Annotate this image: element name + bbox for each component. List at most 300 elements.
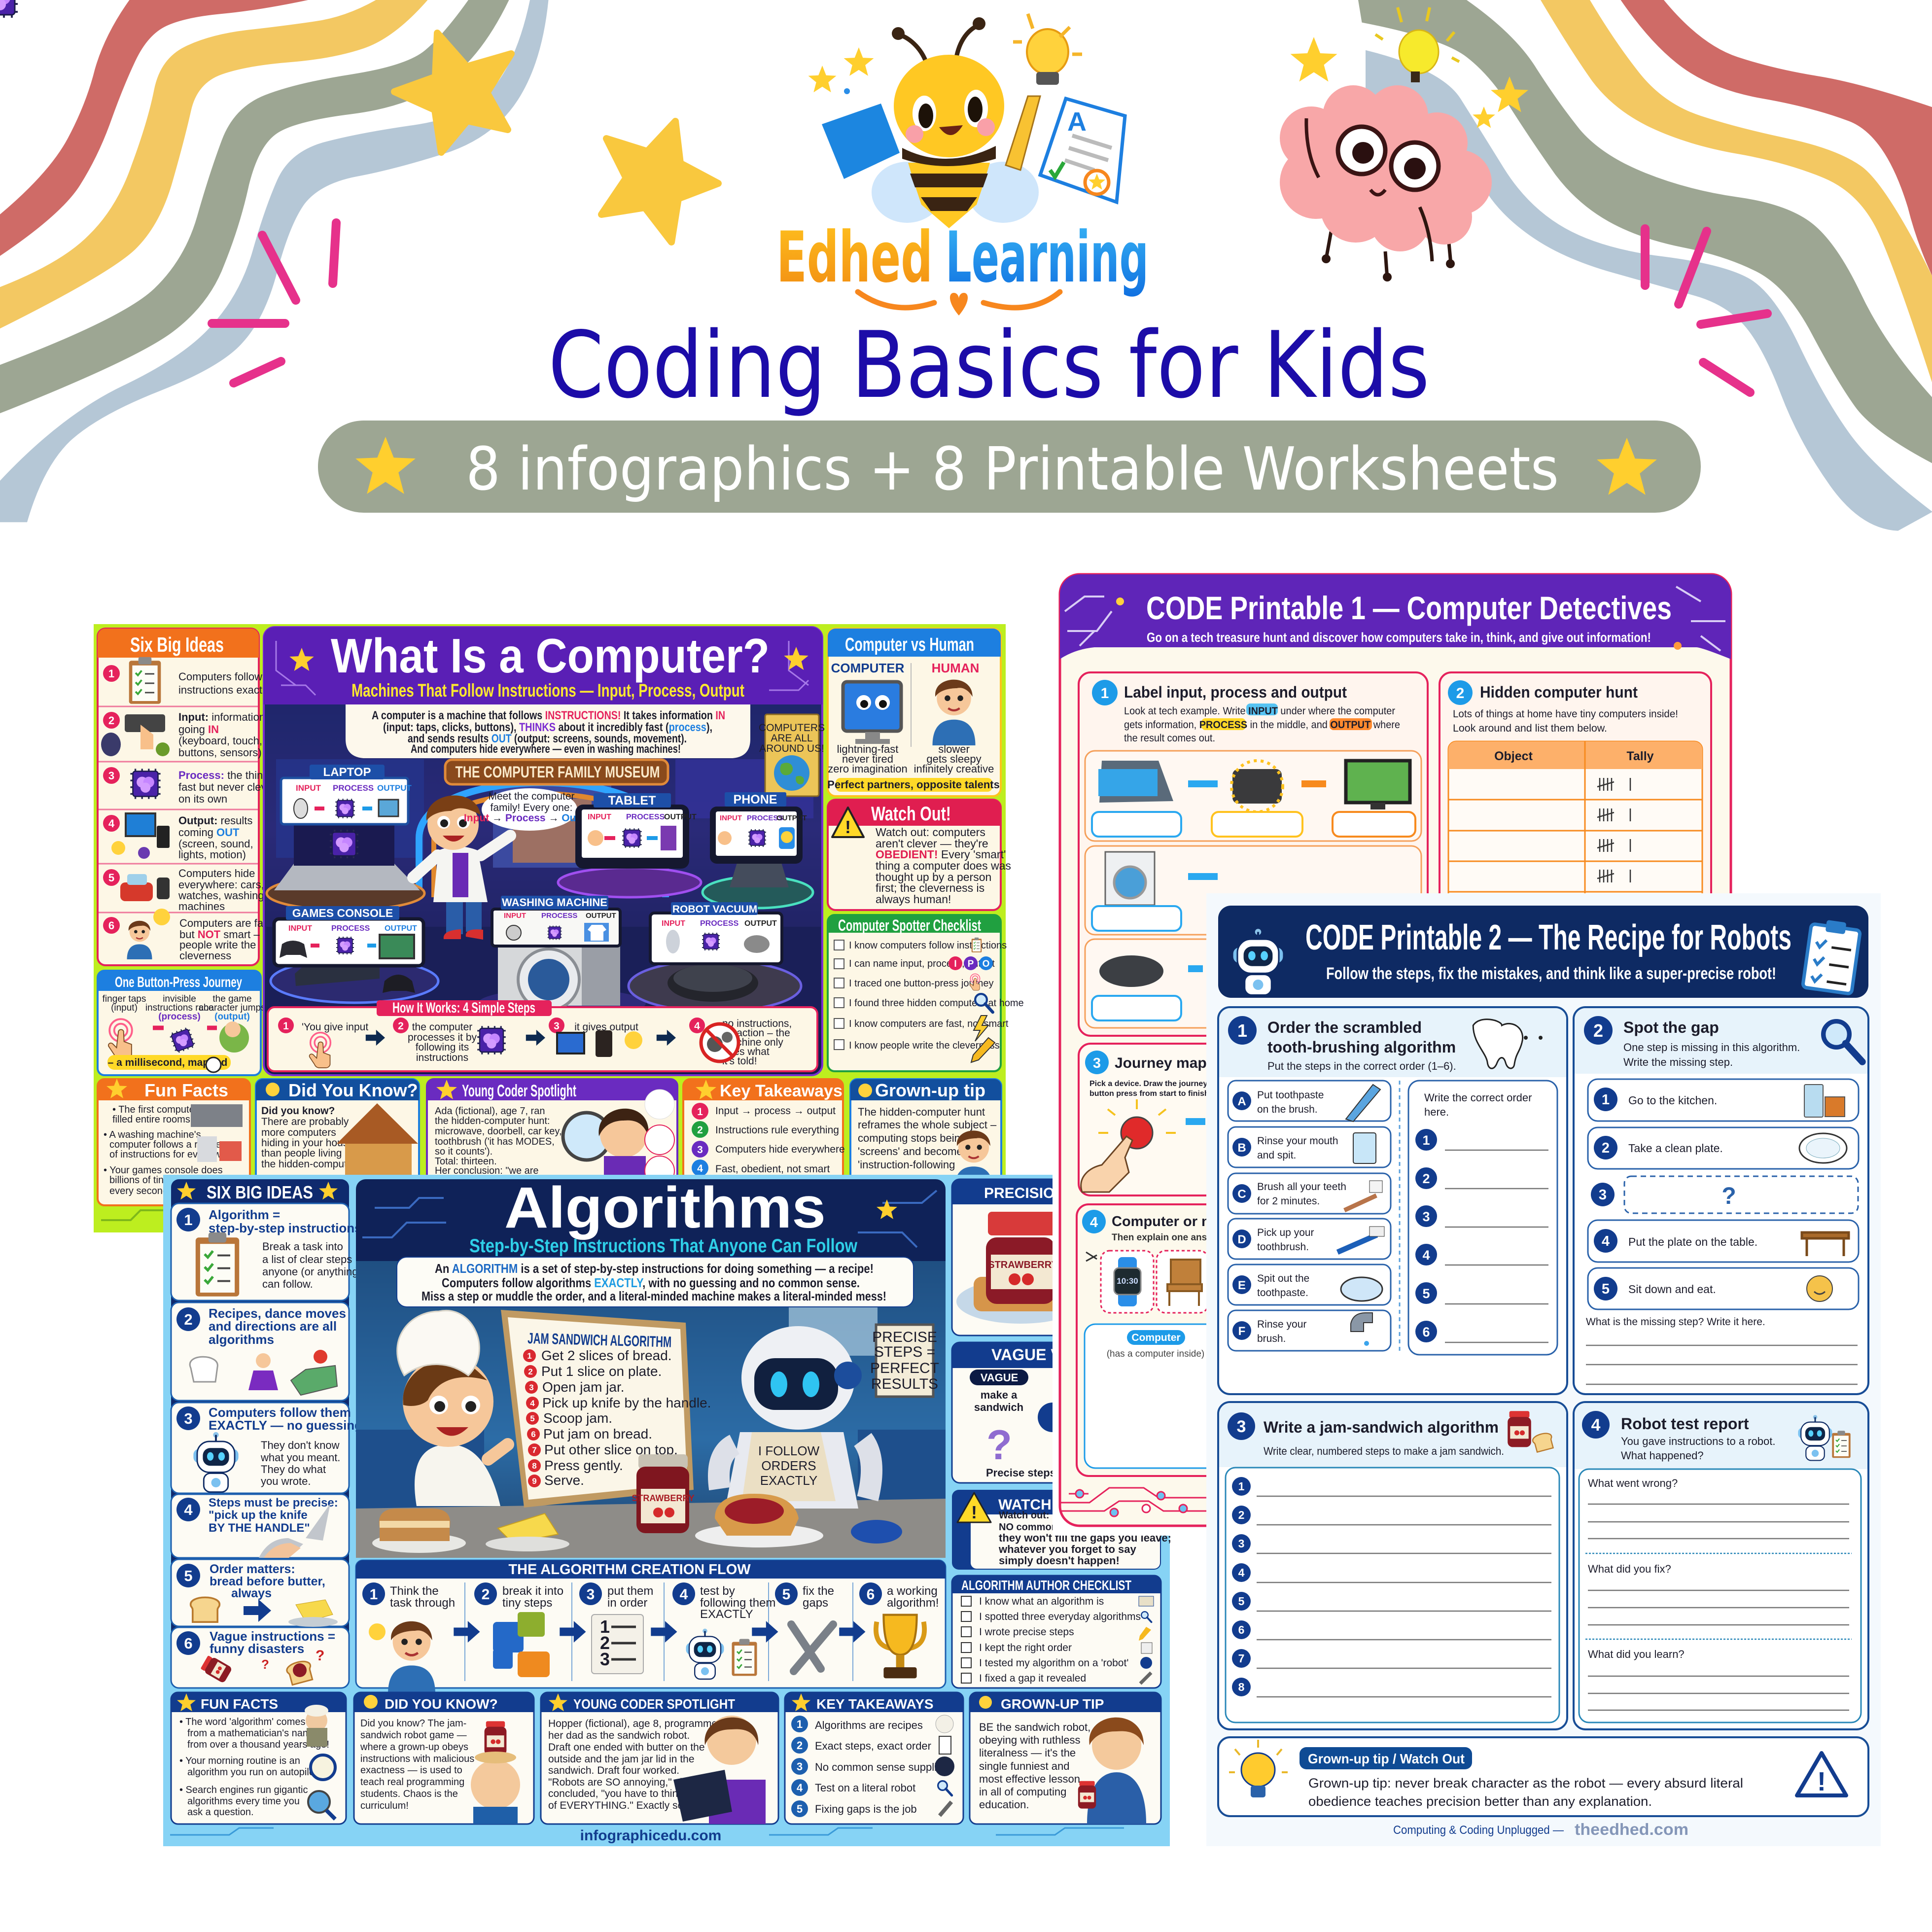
panel: six big ideas: people write the — [179, 939, 256, 951]
panel: grown-up tip: literalness — it's the — [979, 1747, 1076, 1759]
sign: computers are all around us: ARE ALL — [771, 733, 813, 744]
panel 3: write a jam-sandwich algorithm: 6 — [1238, 1623, 1244, 1636]
panel: computer vs human — [827, 629, 1001, 796]
scrambled step cards: D — [1237, 1233, 1246, 1246]
panel: how it works: does what — [722, 1046, 770, 1057]
panel: key takeaways: 2 — [797, 1739, 803, 1752]
robot: ORDERS — [761, 1458, 816, 1473]
panel 3: write a jam-sandwich algorithm: 1 — [1238, 1480, 1245, 1493]
header band — [264, 627, 822, 704]
panel: fun facts: • Your morning routine is an — [179, 1756, 300, 1766]
worksheet 1: computer detectives — [1053, 568, 1738, 1536]
icon: star top left — [394, 33, 511, 152]
panel: watch out: Watch Out! — [871, 803, 951, 825]
panel: six big ideas: 2 — [108, 714, 114, 727]
panel: did you know: exactness — is used to — [360, 1765, 462, 1776]
panel 3: write a jam-sandwich algorithm: 8 — [1238, 1681, 1245, 1693]
panel: six big ideas: Input: information — [178, 711, 265, 723]
panel 2: spot the gap: 1 — [1602, 1092, 1610, 1108]
panel: computer spotter checklist: P — [968, 959, 974, 969]
panel: algorithm creation flow: put them — [607, 1584, 653, 1598]
panel: grown-up tip: 'instruction-following — [858, 1159, 955, 1171]
panel: six big ideas: coming OUT — [178, 826, 240, 839]
panel: six big ideas: a list of clear steps — [262, 1253, 352, 1265]
panel: key takeaways: Fast, obedient, not smart — [715, 1163, 830, 1175]
panel: six big ideas: machines — [178, 900, 225, 913]
panel: key takeaways: No common sense supplied — [815, 1761, 948, 1773]
scrambled step cards: C — [1237, 1188, 1246, 1201]
panel: computer vs human: slower — [938, 743, 970, 755]
panel: young coder spotlight: Draft one ended with butter on the — [548, 1742, 705, 1753]
decorative wave stripes right — [1358, 0, 1932, 531]
panel: computer vs human: lightning-fast — [837, 743, 898, 755]
panel: six big ideas: fast but never clever — [178, 781, 276, 793]
panel: six big ideas: "pick up the knife — [209, 1509, 308, 1522]
panel 1: label input, process, output: Look at tech example. Write INPUT under where the computer — [1124, 705, 1395, 717]
correct order box: Write the correct order — [1424, 1091, 1532, 1104]
panel: key takeaways: 4 — [797, 1782, 803, 1794]
chef boy — [397, 1310, 508, 1506]
panel: six big ideas: Break a task into — [262, 1240, 343, 1253]
panel: one button-press journey: the game — [212, 994, 252, 1004]
panel 3: write a jam-sandwich algorithm: 5 — [1238, 1595, 1245, 1608]
panel: did you know: where a grown-up obeys — [360, 1742, 468, 1753]
sign: precise steps: RESULTS — [871, 1376, 938, 1392]
panel 1: order the scrambled algorithm: Order the scrambled — [1267, 1019, 1422, 1036]
panel: grown-up tip watch out: Grown-up tip: never break character as the robot — every absurd literal — [1308, 1776, 1743, 1791]
panel: algorithm creation flow: task through — [390, 1596, 455, 1610]
panel: young coder spotlight: Total: thirteen. — [435, 1156, 497, 1167]
intro box — [397, 1257, 913, 1307]
panel: young coder spotlight: outside and the jam jar lid in the — [548, 1754, 695, 1765]
panel: six big ideas — [98, 629, 292, 965]
banner: the computer family museum — [445, 760, 668, 784]
sign: computers are all around us — [759, 714, 825, 796]
panel: young coder spotlight: toothbrush ('it has MODES, — [435, 1136, 555, 1147]
robot — [719, 1326, 872, 1509]
panel: computer vs human: gets sleepy — [926, 753, 982, 765]
panel: fun facts: from over a thousand years ago! — [187, 1739, 329, 1750]
panel: how it works: 3 — [554, 1020, 560, 1032]
panel: key takeaways: Input → process → output — [715, 1105, 836, 1117]
panel: six big ideas: Vague instructions = — [210, 1629, 335, 1644]
panel: did you know: Did You Know? — [288, 1080, 418, 1100]
laptop exhibit: LAPTOP — [323, 766, 371, 779]
panel 3: journey map: 3 — [1093, 1055, 1101, 1071]
board: jam sandwich algorithm: 9 — [532, 1476, 537, 1486]
panel: key takeaways: Computers hide everywhere — [715, 1144, 845, 1155]
panel: watch out: thought up by a person — [876, 871, 991, 883]
panel: key takeaways: 2 — [697, 1124, 703, 1136]
panel: six big ideas — [171, 1179, 367, 1688]
panel: six big ideas: on its own — [178, 793, 227, 805]
panel: young coder spotlight — [427, 1079, 677, 1205]
correct order box — [1408, 1081, 1557, 1355]
panel 3: write a jam-sandwich algorithm: 7 — [1238, 1652, 1244, 1665]
panel: young coder spotlight: Hopper (fictional), age 8, programmed — [548, 1718, 723, 1729]
panel: key takeaways: Test on a literal robot — [815, 1782, 915, 1794]
robot vacuum exhibit: OUTPUT — [744, 919, 777, 928]
panel 2: spot the gap: Write the missing step. — [1623, 1056, 1733, 1068]
panel: one button-press journey: (output) — [214, 1012, 250, 1022]
games console exhibit: OUTPUT — [385, 924, 417, 933]
intro box — [346, 704, 750, 758]
panel: how it works: the computer — [412, 1021, 472, 1033]
games console exhibit: PROCESS — [331, 924, 370, 933]
panel: algorithm creation flow: a working — [887, 1584, 938, 1598]
subtitle: Step-by-Step Instructions That Anyone Can Follow — [469, 1235, 858, 1257]
panel: watch out: OBEDIENT! Every 'smart' — [876, 848, 1006, 861]
panel: young coder spotlight: sandwich. Draft four worked. — [548, 1765, 679, 1776]
panel: how it works: instructions — [416, 1052, 468, 1063]
panel: six big ideas: 4 — [184, 1501, 193, 1518]
panel: six big ideas: you wrote. — [261, 1475, 311, 1487]
panel: grown-up tip: BE the sandwich robot, — [979, 1721, 1090, 1733]
sign: precise steps: PERFECT — [870, 1360, 939, 1376]
speech bubble: Meet the computer — [488, 791, 575, 802]
panel: fun facts: • Search engines run gigantic — [179, 1785, 308, 1795]
panel: algorithm author checklist: ALGORITHM AUTHOR CHECKLIST — [961, 1578, 1131, 1593]
phone exhibit: PROCESS — [747, 814, 783, 822]
panel 2: hidden computer hunt — [1440, 672, 1711, 968]
panel: computer spotter checklist: I traced one button-press journey — [849, 978, 994, 989]
panel: one button-press journey: (input) — [111, 1003, 138, 1013]
panel: watch out: Watch out: computers — [876, 826, 985, 839]
robot vacuum exhibit — [629, 902, 801, 1012]
intro box: Miss a step or muddle the order, and a literal-minded machine makes a literal-minded mess! — [422, 1289, 886, 1303]
panel: algorithm author checklist: I know what an algorithm is — [979, 1596, 1104, 1607]
worksheet 2: recipe for robots — [1206, 893, 1881, 1846]
panel: main hero — [0, 0, 825, 1075]
panel: young coder spotlight: Her conclusion: "we are — [435, 1165, 539, 1176]
header band — [1060, 574, 1731, 659]
panel 2: spot the gap: 3 — [1599, 1187, 1607, 1203]
panel: how it works: no instructions, — [722, 1018, 792, 1029]
panel: computer spotter checklist: I — [954, 959, 957, 969]
icon: star centre left — [601, 121, 718, 242]
panel 3: journey map: Pick a device. Draw the journey of one — [1089, 1080, 1233, 1088]
panel 2: spot the gap: ? — [1721, 1183, 1736, 1209]
logo: bee mascot — [872, 17, 1039, 228]
panel: fun facts: of instructions for every wash. — [109, 1149, 240, 1160]
panel: six big ideas: Output: results — [178, 814, 252, 827]
panel 2: spot the gap: One step is missing in this algorithm. — [1623, 1041, 1800, 1054]
panel 4: robot test report: 4 — [1591, 1416, 1601, 1435]
board: jam sandwich algorithm: 1 — [527, 1351, 532, 1361]
panel 1: order the scrambled algorithm: 1 — [1237, 1020, 1247, 1041]
laptop exhibit: INPUT — [296, 783, 321, 793]
panel 2: hidden computer hunt: Look around and list them below. — [1453, 723, 1607, 734]
panel 1: label input, process, output: 1 — [1101, 685, 1109, 702]
panel: six big ideas: 5 — [108, 872, 114, 884]
icon: blue book — [822, 104, 900, 179]
panel 1: order the scrambled algorithm — [1218, 1007, 1567, 1394]
panel: young coder spotlight: Ada (fictional), age 7, ran — [435, 1106, 545, 1117]
panel: vague vs: VAGUE VS — [991, 1346, 1072, 1364]
panel: watch: they won't fill the gaps you leave; — [999, 1532, 1171, 1544]
panel: key takeaways: 3 — [697, 1144, 703, 1156]
panel: six big ideas: Six Big Ideas — [130, 633, 224, 656]
boy character — [413, 796, 510, 940]
panel: six big ideas: but NOT smart – — [179, 928, 260, 941]
panel 4: computer or not: Computer or not — [1112, 1214, 1224, 1229]
scrambled step cards: Put toothpaste — [1257, 1089, 1324, 1101]
panel 4: computer or not: 10:30 — [1117, 1276, 1138, 1286]
board: jam sandwich algorithm: Put jam on bread. — [543, 1426, 652, 1441]
board: jam sandwich algorithm: Get 2 slices of bread. — [541, 1348, 672, 1363]
intro box: (input: taps, clicks, buttons), THINKS about it incredibly fast (process), — [383, 721, 712, 734]
panel 4: computer or not: Computer — [1131, 1332, 1181, 1343]
panel: fun facts: Fun Facts — [144, 1080, 228, 1100]
panel: did you know — [256, 1079, 419, 1205]
panel: six big ideas: can follow. — [262, 1278, 313, 1290]
panel: vague vs — [952, 1342, 1161, 1483]
correct order box: 3 — [1422, 1209, 1430, 1224]
panel: six big ideas: 2 — [184, 1311, 193, 1328]
board: jam sandwich algorithm: 7 — [532, 1445, 537, 1455]
panel: computer vs human: HUMAN — [932, 661, 979, 675]
circuit strip — [101, 1210, 986, 1228]
panel: fun facts: • Your games console does — [104, 1165, 223, 1176]
panel: how it works: machine only — [722, 1037, 783, 1048]
panel: did you know: than people living in it – — [261, 1148, 370, 1159]
panel 2: hidden computer hunt: Object — [1494, 749, 1533, 763]
panel: did you know: teach real programming — [360, 1777, 464, 1788]
jam jar: STRAWBERRY — [632, 1493, 695, 1503]
panel 2: spot the gap: 4 — [1602, 1233, 1610, 1249]
panel: watch out: ! — [845, 817, 851, 837]
panel: vague vs: make a — [981, 1389, 1018, 1401]
panel 3: write a jam-sandwich algorithm: 3 — [1237, 1417, 1246, 1436]
panel: computer vs human: Computer vs Human — [845, 634, 974, 655]
panel 2: spot the gap: 2 — [1593, 1020, 1603, 1041]
scene: museum background — [266, 759, 821, 1011]
panel: grown-up tip watch out — [1218, 1737, 1868, 1816]
panel: grown-up tip: obeying with ruthless — [979, 1734, 1080, 1746]
panel: watch out: thing a computer does was — [876, 859, 1011, 872]
panel: computer vs human: never tired — [842, 753, 893, 765]
panel 2: spot the gap: 2 — [1602, 1140, 1610, 1156]
phone exhibit: INPUT — [720, 814, 742, 822]
panel: how it works: it gives output — [574, 1021, 638, 1033]
panel: six big ideas: 6 — [184, 1635, 193, 1652]
icon: yellow bulb and sparkles — [1291, 7, 1528, 128]
panel 2: hidden computer hunt: Lots of things at home have tiny computers inside! — [1453, 708, 1678, 720]
panel: six big ideas: buttons, sensors) — [178, 746, 262, 759]
panel: watch — [952, 1490, 1171, 1570]
panel: computer vs human: Perfect partners, opposite talents — [827, 778, 1000, 791]
panel: did you know: sandwich robot game — — [360, 1730, 467, 1741]
panel: algorithm creation flow: 2 — [482, 1586, 490, 1603]
panel: young coder spotlight: "Robots are SO annoying," she — [548, 1777, 691, 1788]
board: jam sandwich algorithm: Put other slice on top. — [544, 1442, 678, 1457]
panel: vague vs: Precise steps ar — [986, 1467, 1069, 1479]
subtitle pill: 8 infographics + 8 Printable Worksheets — [466, 435, 1559, 504]
games console exhibit: GAMES CONSOLE — [292, 907, 393, 919]
intro box: And computers hide everywhere — even in washing machines! — [411, 742, 681, 756]
panel: did you know — [354, 1692, 534, 1824]
panel: key takeaways: KEY TAKEAWAYS — [816, 1696, 934, 1712]
robot vacuum exhibit: PROCESS — [700, 919, 739, 928]
panel: algorithm author checklist — [952, 1576, 1161, 1688]
scrambled step cards: A — [1237, 1095, 1246, 1108]
footer: theedhed.com — [1575, 1820, 1688, 1838]
robot: EXACTLY — [760, 1473, 817, 1488]
panel: young coder spotlight: of EVERYTHING." Exactly so. — [548, 1800, 686, 1811]
panel: fun facts: filled entire rooms! — [112, 1114, 193, 1125]
panel 3: journey map: button press from start to finish. — [1089, 1089, 1211, 1098]
panel: six big ideas: step-by-step instructions — [209, 1221, 362, 1235]
panel: key takeaways — [785, 1692, 963, 1824]
sign: precise steps: PRECISE — [872, 1329, 937, 1345]
panel 2: spot the gap: Sit down and eat. — [1628, 1283, 1716, 1296]
panel 4: computer or not — [1077, 1204, 1274, 1476]
panel: algorithm creation flow: tiny steps — [502, 1596, 552, 1610]
panel: vague vs: sandwich — [974, 1401, 1023, 1413]
correct order box: 1 — [1422, 1133, 1430, 1148]
scrambled step cards: Spit out the — [1257, 1273, 1309, 1284]
robot vacuum exhibit: INPUT — [662, 919, 685, 928]
icon: brain mascot — [1280, 85, 1492, 281]
panel 1: order the scrambled algorithm: Put the steps in the correct order (1–6). — [1267, 1060, 1456, 1072]
panel: six big ideas: lights, motion) — [178, 848, 246, 861]
panel: six big ideas: They do what — [261, 1463, 326, 1475]
panel: fun facts: from a mathematician's name — [187, 1728, 316, 1739]
panel: six big ideas: (screen, sound, — [178, 838, 253, 850]
panel: six big ideas: BY THE HANDLE" — [209, 1521, 310, 1535]
panel 2: hidden computer hunt: Tally — [1626, 749, 1654, 763]
intro box: and sends results OUT (output: screens, sounds, movement). — [408, 732, 687, 745]
games console exhibit: INPUT — [288, 924, 312, 933]
panel: key takeaways: 4 — [697, 1163, 703, 1174]
panel 1: label input, process, output: gets information, PROCESS in the middle, and OUTPUT where — [1124, 719, 1400, 731]
panel: computer spotter checklist: I found three hidden computers at home — [849, 998, 1024, 1009]
panel: fun facts — [171, 1692, 346, 1824]
washing machine exhibit: INPUT — [504, 912, 526, 920]
panel 4: robot test report: What happened? — [1621, 1449, 1704, 1462]
panel: fun facts: • The word 'algorithm' comes — [179, 1717, 305, 1727]
board: jam sandwich algorithm: Put 1 slice on plate. — [541, 1364, 662, 1379]
panel 2: hidden computer hunt: Hidden computer hunt — [1480, 683, 1638, 701]
scrambled step cards: Rinse your mouth — [1257, 1135, 1338, 1147]
panel 1: label input, process, output — [1079, 672, 1428, 1036]
panel: watch: simply doesn't happen! — [999, 1554, 1120, 1567]
panel: algorithm creation flow: 5 — [782, 1586, 790, 1603]
panel: key takeaways: 1 — [697, 1106, 703, 1118]
panel: computer spotter checklist: I know computers follow instructions — [849, 940, 1007, 951]
panel: six big ideas: EXACTLY — no guessing! — [209, 1418, 367, 1433]
title: What Is a Computer? — [331, 629, 770, 683]
panel: algorithm creation flow: EXACTLY — [700, 1608, 753, 1621]
speech bubble: Input → Process → Output! — [464, 812, 599, 824]
panel: six big ideas: Algorithm = — [209, 1207, 280, 1222]
robot vacuum exhibit: ROBOT VACUUM — [672, 904, 757, 915]
panel: six big ideas: ? — [316, 1648, 324, 1664]
panel: six big ideas: bread before butter, — [210, 1575, 325, 1588]
correct order box: here. — [1424, 1106, 1449, 1118]
laptop exhibit: PROCESS — [333, 783, 374, 793]
robot: I FOLLOW — [758, 1443, 820, 1458]
tablet exhibit: PROCESS — [626, 813, 665, 821]
icon: warning triangle — [1797, 1753, 1846, 1796]
panel: how it works: 1 — [283, 1020, 289, 1032]
header band: Go on a tech treasure hunt and discover how computers take in, think, and give out information! — [1147, 630, 1651, 645]
intro box: A computer is a machine that follows INSTRUCTIONS! It takes information IN — [372, 709, 725, 722]
panel: algorithm creation flow: in order — [607, 1596, 647, 1610]
panel: computer vs human: COMPUTER — [831, 661, 905, 675]
panel 2: spot the gap: 5 — [1602, 1281, 1610, 1297]
board: jam sandwich algorithm: Press gently. — [544, 1458, 623, 1473]
board: jam sandwich algorithm: 8 — [532, 1461, 537, 1471]
panel: key takeaways: Instructions rule everything — [715, 1124, 839, 1136]
panel: computer spotter checklist: Computer Spotter Checklist — [838, 916, 981, 934]
panel: key takeaways: 3 — [797, 1760, 803, 1773]
panel: algorithm author checklist: I kept the right order — [979, 1642, 1072, 1653]
panel 4: robot test report: What did you fix? — [1588, 1563, 1671, 1575]
icon: warning triangle: ! — [1817, 1767, 1826, 1796]
sign: computers are all around us: AROUND US! — [759, 743, 824, 754]
panel: vague vs: VAGUE — [981, 1371, 1018, 1384]
panel: how it works: 'You give input — [302, 1021, 368, 1033]
washing machine exhibit: PROCESS — [541, 912, 577, 920]
board: jam sandwich algorithm: JAM SANDWICH ALGORITHM — [527, 1330, 672, 1351]
footer url: infographicedu.com — [580, 1827, 721, 1844]
panel: grown-up tip: education. — [979, 1798, 1029, 1811]
panel: main header — [356, 1175, 946, 1261]
panel: did you know: There are probably — [261, 1116, 349, 1127]
panel: algorithm author checklist: I wrote precise steps — [979, 1626, 1074, 1638]
decorative wave stripes left — [0, 0, 548, 522]
panel: watch out: aren't clever — they're — [876, 837, 988, 850]
panel: one button-press journey: – a millisecond, mapped — [108, 1057, 227, 1068]
panel: precision: STRAWBERRY — [988, 1260, 1058, 1270]
board: jam sandwich algorithm: Scoop jam. — [543, 1410, 612, 1426]
panel: precision: PRECISION — [984, 1185, 1065, 1201]
panel 3: write a jam-sandwich algorithm — [1218, 1402, 1567, 1729]
panel: one button-press journey: instructions race — [145, 1003, 213, 1013]
panel: six big ideas: 6 — [108, 919, 114, 932]
panel: algorithm creation flow: following them — [700, 1596, 775, 1610]
panel: did you know: Did you know? The jam- — [360, 1718, 466, 1729]
panel: watch out: first; the cleverness is — [876, 881, 984, 894]
title: Coding Basics for Kids — [548, 312, 1430, 419]
panel: six big ideas: 1 — [184, 1211, 193, 1229]
panel 3: journey map — [1079, 1044, 1276, 1195]
panel: fun facts: ask a question. — [187, 1807, 254, 1818]
panel: grown-up tip: single funniest and — [979, 1760, 1069, 1772]
correct order box: 4 — [1422, 1248, 1430, 1263]
header band: CODE Printable 1 — Computer Detectives — [1146, 590, 1672, 626]
panel: watch: WATCH — [998, 1497, 1052, 1513]
panel: algorithm creation flow: THE ALGORITHM CREATION FLOW — [508, 1562, 751, 1578]
scrambled step cards: for 2 minutes. — [1257, 1195, 1320, 1207]
panel: how it works: following its — [416, 1042, 469, 1053]
panel: six big ideas: 1 — [108, 667, 114, 680]
panel: fun facts: every second. — [109, 1186, 171, 1196]
panel: algorithm creation flow: Think the — [390, 1584, 439, 1598]
washing machine exhibit: WASHING MACHINE — [502, 896, 607, 909]
panel: algorithm creation flow: break it into — [502, 1584, 563, 1598]
panel: six big ideas: ? — [261, 1657, 269, 1672]
header band — [1218, 906, 1868, 998]
panel: how it works: processes it by — [408, 1032, 477, 1043]
logo wordmark: Edhed — [776, 217, 933, 298]
title: Algorithms — [504, 1175, 826, 1240]
panel: did you know: more computers — [261, 1127, 336, 1138]
scrambled step cards: E — [1238, 1279, 1246, 1292]
panel: computer vs human: infinitely creative — [914, 763, 994, 775]
tablet exhibit: INPUT — [588, 813, 611, 821]
